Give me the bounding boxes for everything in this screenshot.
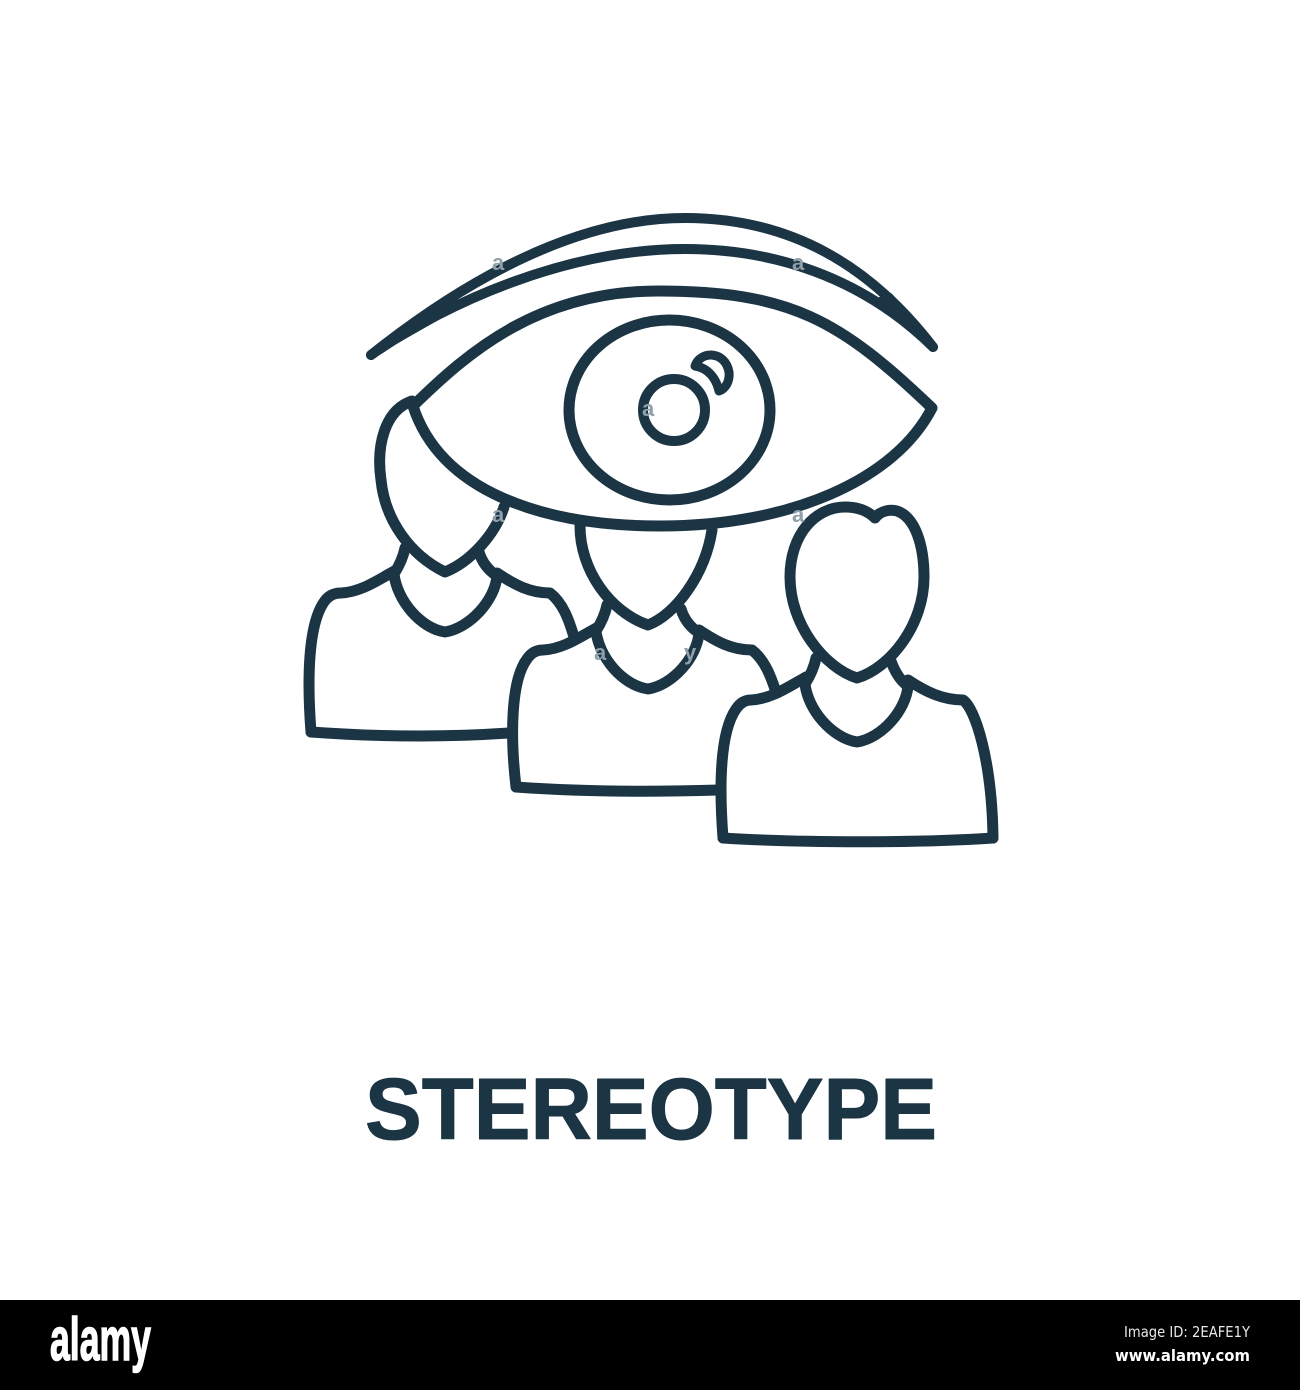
watermark marks: a bbox=[792, 250, 805, 275]
watermark marks: a bbox=[792, 502, 805, 527]
watermark marks: a bbox=[492, 250, 505, 275]
person: middle bbox=[513, 526, 776, 791]
eye pupil bbox=[643, 379, 705, 441]
title: STEREOTYPE bbox=[365, 1061, 937, 1158]
person: right bbox=[721, 507, 993, 842]
footer logo: alamy bbox=[50, 1306, 151, 1373]
eyebrow bbox=[371, 218, 933, 355]
watermark marks: a bbox=[642, 396, 655, 421]
eye iris bbox=[569, 320, 770, 500]
image id: Image ID: 2EAFE1Y bbox=[1124, 1323, 1251, 1341]
person: left bbox=[309, 401, 574, 736]
watermark marks: y bbox=[684, 640, 697, 665]
watermark marks: a bbox=[492, 502, 505, 527]
eye highlight bbox=[695, 355, 729, 391]
footer bar bbox=[0, 1300, 1300, 1390]
watermark marks bbox=[492, 250, 805, 665]
website: www.alamy.com bbox=[1115, 1346, 1250, 1365]
watermark marks: a bbox=[594, 640, 607, 665]
icon: stereotype eye watching people bbox=[309, 218, 993, 842]
eye outline bbox=[413, 291, 932, 526]
